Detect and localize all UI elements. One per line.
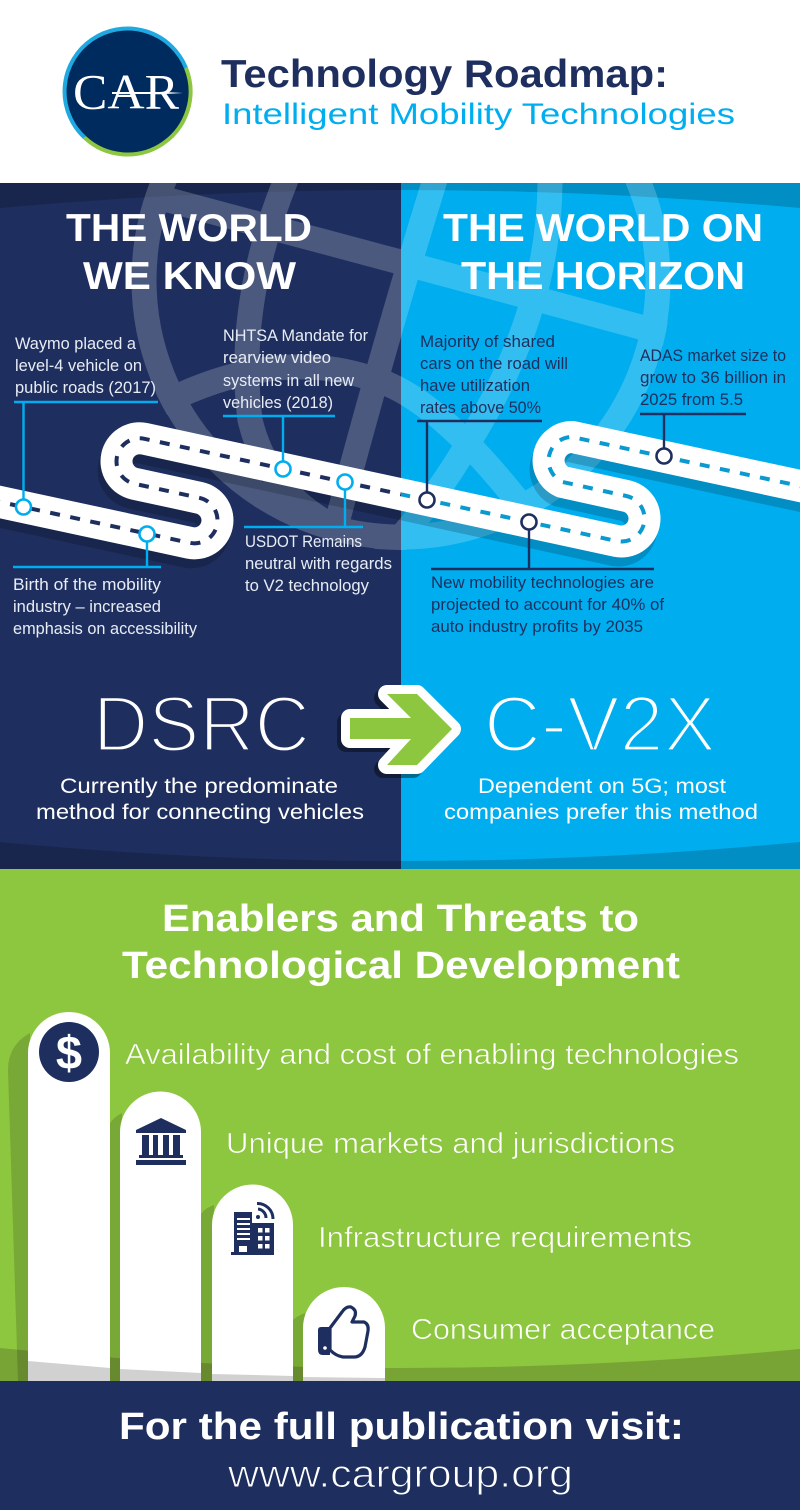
milestone: new mobility profits: New mobility technologies are	[431, 574, 654, 592]
footer	[0, 1381, 800, 1510]
milestone: Birth of mobility industry: emphasis on accessibility	[13, 620, 198, 638]
footer url: www.cargroup.org	[227, 1453, 573, 1496]
C-V2X label: C-V2X	[484, 679, 716, 768]
road illustration	[0, 437, 800, 552]
pillar 4: consumer acceptance	[303, 1287, 715, 1381]
milestone: USDOT: to V2 technology	[245, 577, 370, 595]
milestone: NHTSA: vehicles (2018)	[223, 394, 333, 412]
logo: CAR	[73, 64, 180, 120]
milestone: USDOT: USDOT Remains	[245, 533, 362, 551]
enablers section background	[0, 869, 800, 1381]
milestone: shared cars	[417, 333, 568, 508]
icon: dollar	[39, 1022, 99, 1082]
milestone: shared cars: have utilization	[420, 377, 530, 395]
milestone: Waymo: public roads (2017)	[15, 379, 156, 397]
milestone: USDOT	[244, 474, 392, 595]
heading: the world on the horizon: THE HORIZON	[461, 255, 745, 298]
milestone: Waymo: Waymo placed a	[15, 335, 137, 353]
label: Availability and cost of enabling technologies	[125, 1039, 739, 1071]
timeline section background	[0, 183, 800, 869]
enablers heading: Technological Development	[122, 945, 680, 987]
milestone: NHTSA	[223, 327, 368, 476]
heading: the world on the horizon	[443, 207, 763, 298]
title: Technology Roadmap:	[221, 53, 668, 96]
DSRC label: DSRC	[93, 679, 310, 768]
pillar 1: availability and cost	[28, 1012, 739, 1381]
heading: the world on the horizon: THE WORLD ON	[443, 207, 763, 250]
pillar 3: infrastructure	[212, 1184, 692, 1381]
milestone: new mobility profits	[431, 514, 664, 636]
milestone: shared cars: cars on the road will	[420, 355, 568, 373]
milestone: NHTSA: NHTSA Mandate for	[223, 327, 368, 345]
milestone: ADAS market: ADAS market size to	[640, 347, 786, 365]
icon: dollar: $	[56, 1026, 82, 1079]
milestone: ADAS market: 2025 from 5.5	[640, 391, 743, 409]
heading: the world we know	[66, 207, 312, 298]
milestone: ADAS market	[640, 347, 786, 464]
road shadow	[0, 446, 800, 552]
milestone: Birth of mobility industry	[13, 526, 198, 638]
DSRC description	[36, 774, 364, 824]
milestone: shared cars: Majority of shared	[420, 333, 555, 351]
pillar shadows	[8, 1033, 305, 1381]
label: Infrastructure requirements	[318, 1222, 692, 1254]
milestone: shared cars: rates above 50%	[420, 399, 541, 417]
DSRC description: Currently the predominate	[60, 774, 338, 798]
label: Unique markets and jurisdictions	[226, 1128, 675, 1160]
C-V2X description: companies prefer this method	[444, 800, 758, 824]
lane markings	[0, 437, 800, 543]
milestone: Birth of mobility industry: Birth of the mobility	[13, 576, 162, 594]
enablers heading	[122, 898, 680, 987]
pillar 2: unique markets	[120, 1092, 675, 1381]
milestone: Waymo: level-4 vehicle on	[15, 357, 142, 375]
milestone: NHTSA: systems in all new	[223, 372, 354, 390]
icon: bank	[136, 1118, 186, 1165]
DSRC description: method for connecting vehicles	[36, 800, 364, 824]
milestone: USDOT: neutral with regards	[245, 555, 392, 573]
milestone: NHTSA: rearview video	[223, 349, 331, 367]
C-V2X description: Dependent on 5G; most	[478, 774, 726, 798]
header band	[0, 0, 800, 183]
milestone: ADAS market: grow to 36 billion in	[640, 369, 786, 387]
milestone: new mobility profits: auto industry profits by 2035	[431, 618, 643, 636]
milestone: Waymo	[14, 335, 158, 514]
heading: the world we know: WE KNOW	[83, 255, 297, 298]
milestone: new mobility profits: projected to account for 40% of	[431, 596, 664, 614]
logo	[65, 29, 191, 155]
globe backdrop	[132, 183, 670, 550]
footer call to action: For the full publication visit:	[119, 1406, 684, 1448]
C-V2X description	[444, 774, 758, 824]
heading: the world we know: THE WORLD	[66, 207, 312, 250]
milestone: Birth of mobility industry: industry – increased	[13, 598, 161, 616]
subtitle: Intelligent Mobility Technologies	[222, 98, 735, 131]
icon: thumbs up	[318, 1307, 368, 1357]
road surface	[0, 437, 800, 543]
enablers heading: Enablers and Threats to	[162, 898, 639, 940]
icon: connected building	[231, 1203, 274, 1255]
label: Consumer acceptance	[411, 1314, 715, 1346]
arrow: DSRC to C-V2X	[346, 694, 452, 769]
